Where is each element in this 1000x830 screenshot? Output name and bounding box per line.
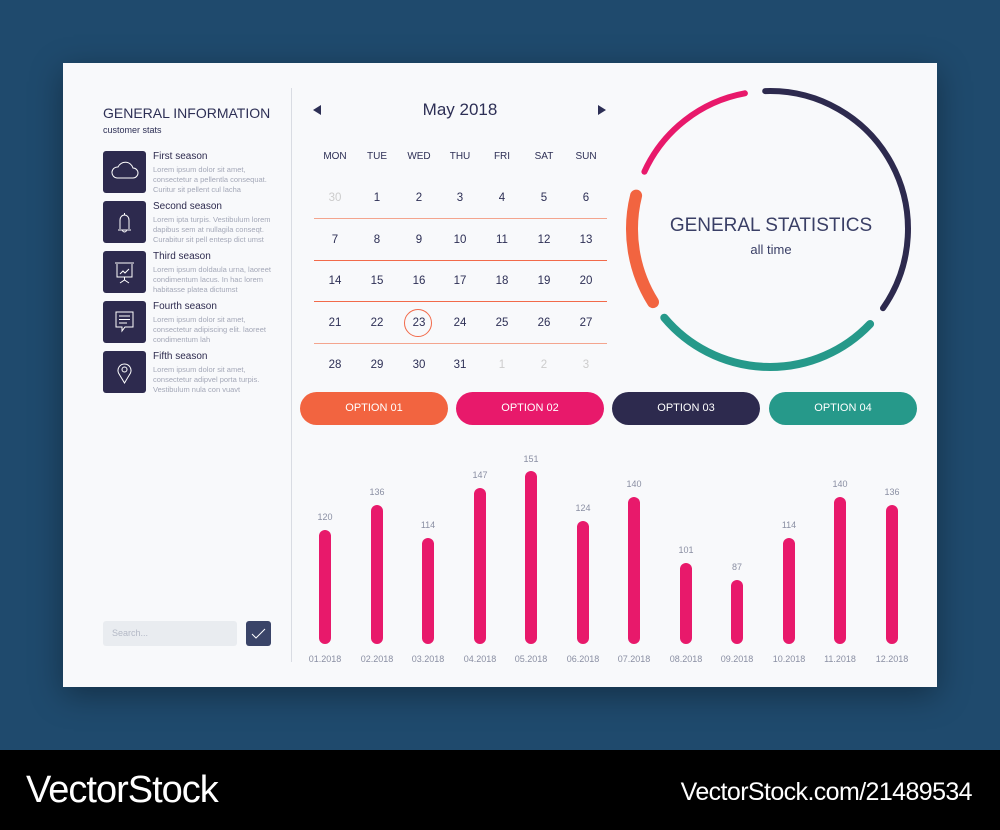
icon: chat (103, 301, 146, 343)
item: second season (103, 201, 271, 244)
bar chart: 04.2018 (464, 654, 496, 664)
bar chart (309, 454, 908, 664)
calendar grid: TUE (367, 151, 387, 162)
footer watermark bar (0, 750, 1000, 830)
arrow right (598, 105, 606, 115)
bar chart: 101 (678, 545, 694, 555)
card panel (63, 63, 937, 687)
item: third season: Lorem ipsum doldaula urna, laoreet condimentum lacus. In hac lorem habitasse platea dictumst (153, 265, 271, 294)
item: third season (103, 251, 271, 294)
calendar grid: 28 (329, 359, 341, 371)
icon: bell (103, 201, 146, 243)
bar chart: 140 (626, 479, 642, 489)
icon: cloud (103, 151, 146, 193)
calendar grid: 5 (541, 192, 547, 204)
calendar grid: 23 (413, 317, 425, 329)
calendar grid (314, 151, 607, 371)
icon: check button (246, 621, 271, 646)
item: first season (103, 151, 267, 194)
bar chart: 03.2018 (412, 654, 444, 664)
bar chart: 09.2018 (721, 654, 753, 664)
calendar grid: 3 (457, 192, 463, 204)
item: fourth season: Lorem ipsum dolor sit amet, consectetur adipiscing elit. laoreet condimentum lah (153, 315, 266, 344)
calendar grid: 15 (371, 275, 383, 287)
calendar grid: FRI (494, 151, 510, 162)
calendar grid: 22 (371, 317, 383, 329)
calendar grid: 25 (496, 317, 508, 329)
bar chart: 136 (369, 487, 385, 497)
bar chart: 06.2018 (567, 654, 599, 664)
option buttons: OPTION 02 (501, 402, 559, 414)
calendar grid: 10 (454, 234, 466, 246)
calendar grid: 13 (580, 234, 592, 246)
item: fifth season: Lorem ipsum dolor sit amet, consectetur adipvel porta turpis. Vestibulum nula con vuavt (153, 365, 259, 394)
item: fifth season (103, 351, 259, 394)
calendar grid: 30 (413, 359, 425, 371)
bar chart: 12.2018 (876, 654, 908, 664)
bar chart: 01.2018 (309, 654, 341, 664)
item: third season: Third season (153, 251, 211, 262)
subheading: customer stats (103, 125, 162, 135)
calendar grid: 18 (496, 275, 508, 287)
calendar grid: 2 (541, 359, 547, 371)
bar chart: 11.2018 (824, 654, 856, 664)
footer watermark bar: VectorStock (26, 769, 218, 811)
calendar grid: 11 (496, 234, 508, 246)
calendar (313, 100, 606, 119)
item: fourth season: Fourth season (153, 301, 217, 312)
calendar grid: 14 (329, 275, 341, 287)
bar chart: 151 (523, 454, 539, 464)
calendar grid: 9 (416, 234, 422, 246)
bar chart: 114 (421, 520, 435, 530)
bar chart: 147 (472, 470, 488, 480)
calendar grid: THU (450, 151, 470, 162)
bar chart: 02.2018 (361, 654, 393, 664)
bar chart: 08.2018 (670, 654, 702, 664)
calendar grid: 7 (332, 234, 338, 246)
calendar grid: 27 (580, 317, 592, 329)
calendar grid: 3 (583, 359, 589, 371)
heading: GENERAL INFORMATION (103, 105, 270, 121)
bar chart: 124 (575, 503, 591, 513)
bar chart: 87 (732, 562, 742, 572)
calendar grid: 8 (374, 234, 380, 246)
footer watermark bar: VectorStock.com/21489534 (681, 778, 972, 806)
bar chart: 136 (884, 487, 900, 497)
donut chart: general statistics (626, 88, 911, 371)
calendar grid: SUN (575, 151, 597, 162)
item: first season: Lorem ipsum dolor sit amet, consectetur a pellentla consequat. Curitur sit pellent cul lacha (153, 165, 267, 194)
calendar grid: 29 (371, 359, 383, 371)
bar chart: 140 (832, 479, 848, 489)
bar chart: 05.2018 (515, 654, 547, 664)
bar chart: 114 (782, 520, 796, 530)
item: fourth season (103, 301, 266, 344)
calendar grid: 30 (329, 192, 341, 204)
item: first season: First season (153, 151, 207, 162)
month header: May 2018 (423, 100, 497, 119)
panel: general information (103, 105, 271, 394)
calendar grid: 19 (538, 275, 550, 287)
calendar grid: 2 (416, 192, 422, 204)
calendar grid: 20 (580, 275, 592, 287)
calendar grid: 1 (374, 192, 380, 204)
calendar grid: 26 (538, 317, 550, 329)
calendar grid: 4 (499, 192, 505, 204)
option buttons: OPTION 03 (657, 402, 715, 414)
arrow left (313, 105, 321, 115)
calendar grid: 1 (499, 359, 505, 371)
calendar grid: 31 (454, 359, 466, 371)
icon: location pin (103, 351, 146, 393)
calendar grid: 16 (413, 275, 425, 287)
option buttons (300, 392, 917, 425)
calendar grid: 21 (329, 317, 341, 329)
item: second season: Second season (153, 201, 222, 212)
donut chart: general statistics: GENERAL STATISTICS (670, 215, 872, 236)
highlighted day circle (404, 309, 432, 337)
calendar grid: SAT (535, 151, 553, 162)
calendar grid: MON (323, 151, 347, 162)
calendar grid: 6 (583, 192, 589, 204)
search box: Search... (112, 628, 148, 638)
calendar grid: 12 (538, 234, 550, 246)
calendar grid: 17 (454, 275, 466, 287)
bar chart: 120 (317, 512, 333, 522)
calendar grid: WED (407, 151, 431, 162)
search box (103, 621, 237, 646)
bar chart: 07.2018 (618, 654, 650, 664)
option buttons: OPTION 04 (814, 402, 872, 414)
item: fifth season: Fifth season (153, 351, 207, 362)
icon: presentation board (103, 251, 146, 293)
calendar grid: 24 (454, 317, 466, 329)
donut chart: general statistics: all time (750, 242, 792, 257)
item: second season: Lorem ipta turpis. Vestibulum lorem dapibus sem at nullagila conseqt. Curabitur sit pell entesp dict umst (153, 215, 271, 244)
option buttons: OPTION 01 (345, 402, 403, 414)
bar chart: 10.2018 (773, 654, 805, 664)
